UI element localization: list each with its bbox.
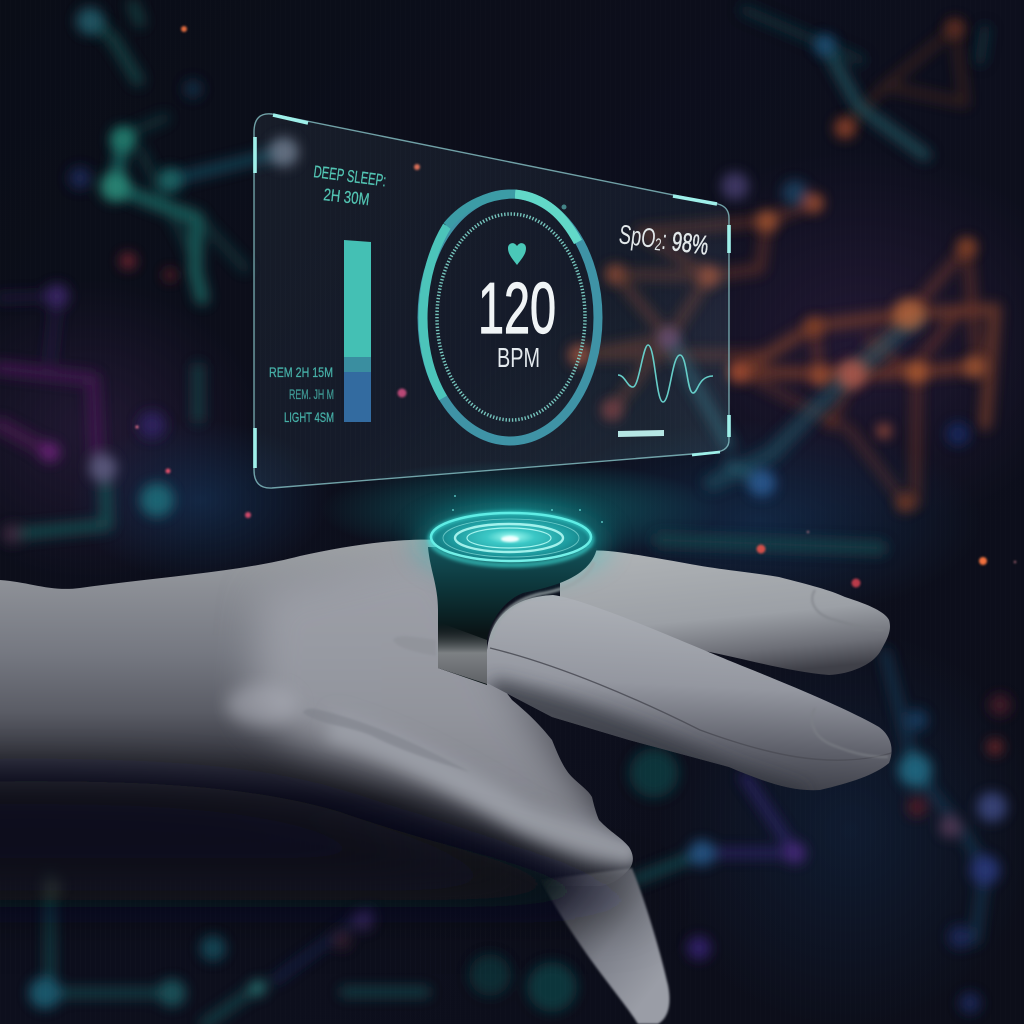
network: teal nodes upper left <box>69 7 299 202</box>
network: teal and blue lines right <box>660 10 985 548</box>
network: lower right and bottom <box>29 653 1011 1024</box>
ring hologram sparks <box>452 204 603 523</box>
ring concentric circles <box>443 519 579 557</box>
text: heart rate value: 120 <box>478 269 556 349</box>
gauge: heart rate ring <box>422 194 598 441</box>
panel corner accents <box>255 115 729 468</box>
sparkle particles <box>136 26 1016 588</box>
ring glowing disc <box>431 513 591 561</box>
network: node glows right <box>568 18 986 512</box>
ring centre light <box>501 536 519 542</box>
text: SpO2 reading: SpO <box>617 219 675 256</box>
hand: underside shadow <box>0 781 640 960</box>
ring band <box>428 547 597 685</box>
hand: middle finger <box>487 595 895 805</box>
text: SpO2 reading: 2 <box>654 235 662 255</box>
panel glass <box>254 114 729 488</box>
knuckle dimple by ring <box>393 636 436 656</box>
text: deep sleep heading: 2H 30M <box>323 185 370 209</box>
panel: holographic display <box>254 114 729 488</box>
sleep stage bar <box>344 240 371 422</box>
hand: lower thumb finger <box>540 868 670 1024</box>
ring glow <box>417 511 607 575</box>
sleep stage labels: REM 2H 15M <box>269 364 333 380</box>
sleep stage labels: LIGHT 4SM <box>284 409 334 425</box>
indicator bar <box>618 430 664 437</box>
network: teal upper left <box>97 5 283 298</box>
finger nail crease <box>812 708 888 757</box>
chart: pulse waveform <box>618 345 713 402</box>
icon: heart <box>508 243 526 265</box>
text: deep sleep heading <box>312 162 387 209</box>
hand: far finger <box>560 550 890 675</box>
finger nail crease <box>812 590 884 630</box>
ring metallic highlights <box>491 562 594 640</box>
hand: palm and index finger <box>0 540 640 886</box>
text: SpO2 reading: 98% <box>670 226 710 261</box>
network: orange right <box>579 28 995 503</box>
text: BPM unit: BPM <box>497 342 540 373</box>
sleep stage labels: REM. JH M <box>289 386 334 402</box>
text: deep sleep heading: DEEP SLEEP: <box>312 162 387 190</box>
ring: smart ring device <box>417 204 607 685</box>
sleep stage labels <box>269 364 334 425</box>
lit area of the back of the hand <box>250 545 640 870</box>
text: SpO2 reading: : <box>660 225 674 256</box>
network: purple left <box>0 253 198 544</box>
knuckle groove <box>303 709 470 772</box>
